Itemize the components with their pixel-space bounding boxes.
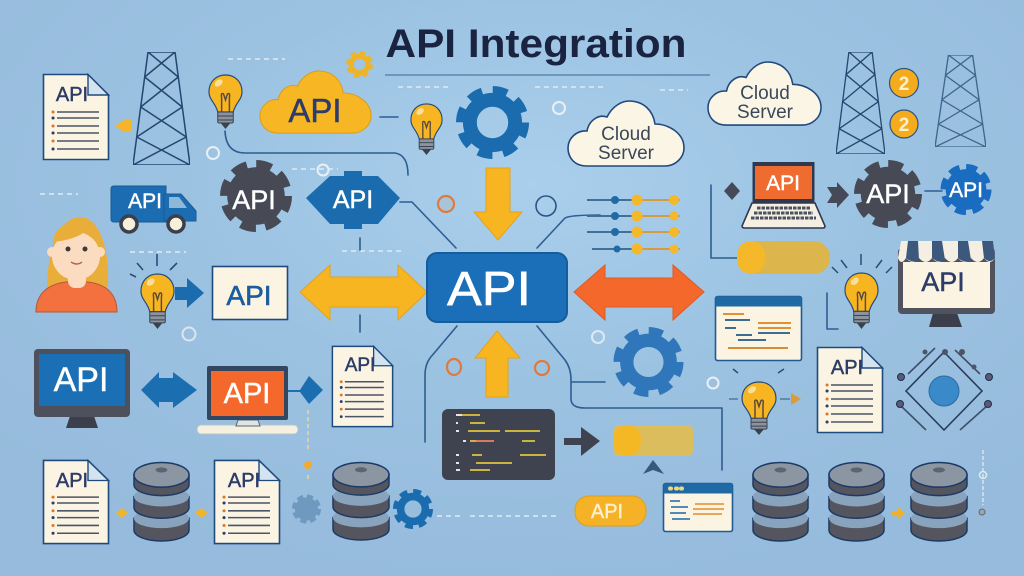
box: API: API	[226, 280, 272, 311]
badge: blue API	[944, 168, 988, 211]
icon: delivery truck	[111, 186, 196, 232]
document: bottom second: API	[228, 470, 260, 492]
database stack 4	[829, 462, 884, 541]
icon: large blue gear	[462, 92, 523, 153]
cloud: yellow API: API	[288, 92, 342, 129]
arrow: small orange	[791, 393, 801, 405]
cloud: yellow API	[260, 71, 371, 133]
arrow: small yellow	[195, 508, 208, 518]
title: API Integration	[386, 22, 686, 66]
arrow: small navy up	[643, 460, 664, 474]
pill: yellow right	[737, 241, 830, 274]
arrow: small yellow	[116, 508, 128, 518]
tower: right 2	[935, 55, 986, 147]
cloud: server 1: Server	[598, 143, 655, 164]
cloud: server 1	[568, 101, 684, 166]
node: white ring	[207, 147, 219, 159]
database stack 2	[333, 462, 389, 540]
icon: light bulb 5	[729, 369, 790, 435]
document: bottom left	[44, 460, 108, 544]
tower: left	[133, 52, 190, 165]
cloud: server 2	[708, 62, 821, 125]
toggle: yellow	[613, 425, 693, 456]
badge: coin 1	[890, 68, 918, 98]
tower: right 1	[836, 52, 885, 154]
document: bottom left: API	[56, 470, 88, 492]
arrow: small yellow	[115, 120, 131, 132]
arrow: dark right	[564, 427, 600, 456]
node: white ring 3	[182, 328, 196, 340]
laptop: top right: API	[766, 172, 800, 195]
gear: dark API right	[859, 165, 917, 223]
node: orange ring lower	[535, 361, 549, 375]
icon: light bulb 1	[209, 75, 242, 129]
arrow: blue double	[141, 372, 197, 408]
document: right: API	[831, 357, 863, 379]
icon: light bulb 3	[130, 254, 177, 329]
box: API	[212, 266, 288, 320]
timeline rows	[587, 194, 680, 254]
badge: blue API: API	[949, 179, 983, 202]
icon: delivery truck: API	[128, 190, 162, 213]
gear: dark API right: API	[866, 179, 910, 209]
gear: blue API hexagon: API	[333, 186, 373, 214]
document: right	[818, 348, 882, 432]
monitor: blue API: API	[54, 361, 108, 399]
document: top left	[44, 74, 108, 160]
gear: blue API hexagon	[306, 171, 400, 229]
network diagram	[896, 348, 992, 430]
icon: light bulb 2	[411, 104, 442, 155]
code panel	[442, 409, 555, 480]
document: bottom second	[214, 460, 280, 544]
gear: faint	[294, 497, 319, 521]
database stack 3	[753, 462, 808, 541]
document: center	[332, 346, 393, 427]
node: white ring 4	[553, 102, 565, 114]
node: white ring 2	[318, 164, 328, 176]
gear: mid blue	[619, 333, 678, 391]
document: top left: API	[56, 84, 88, 106]
node: yellow dot	[304, 461, 312, 469]
arrow: yellow up	[475, 331, 520, 397]
node: navy ring	[536, 196, 556, 216]
arrow: small yellow	[891, 507, 905, 519]
cloud: server 2: Server	[737, 102, 794, 123]
laptop: orange API: API	[224, 378, 270, 410]
gear: small blue	[396, 492, 430, 526]
laptop: orange API	[197, 366, 298, 434]
storefront monitor: API	[921, 267, 965, 297]
arrow: yellow down	[474, 168, 522, 240]
central API box: API	[447, 263, 531, 316]
pill: API yellow	[575, 496, 646, 526]
arrow: blue right	[175, 278, 204, 308]
database stack 5	[911, 462, 967, 541]
code window: large	[716, 296, 802, 360]
node: white ring 5	[708, 378, 718, 388]
arrow: small dark	[724, 182, 740, 200]
central API box	[427, 253, 567, 322]
cloud: server 2: Cloud	[740, 83, 790, 104]
icon: small yellow gear	[348, 53, 371, 76]
icon: light bulb 4	[832, 254, 892, 329]
badge: coin 2	[890, 110, 918, 138]
node: orange ring	[438, 196, 454, 212]
monitor: blue API	[34, 349, 130, 428]
arrow: yellow double	[300, 265, 427, 320]
node: orange ring left	[447, 359, 461, 375]
storefront monitor	[898, 241, 995, 327]
badge: coin 2: 2	[899, 115, 909, 136]
node: right vertical	[979, 450, 986, 515]
node: ring left of gear	[592, 331, 604, 343]
arrow: blue diamond	[288, 376, 323, 404]
cloud: server 1: Cloud	[601, 124, 651, 145]
arrow: dark right	[827, 182, 849, 208]
gear: dark API	[225, 165, 287, 227]
code window: small	[664, 484, 732, 532]
document: center: API	[345, 355, 375, 376]
database stack 1	[134, 462, 189, 541]
person: woman	[36, 217, 117, 312]
gear: dark API: API	[232, 185, 276, 215]
arrow: orange double	[574, 265, 704, 320]
badge: coin 1: 2	[899, 74, 909, 95]
pill: API yellow: API	[591, 501, 623, 523]
connector lines	[225, 83, 942, 470]
laptop: top right	[742, 162, 825, 228]
